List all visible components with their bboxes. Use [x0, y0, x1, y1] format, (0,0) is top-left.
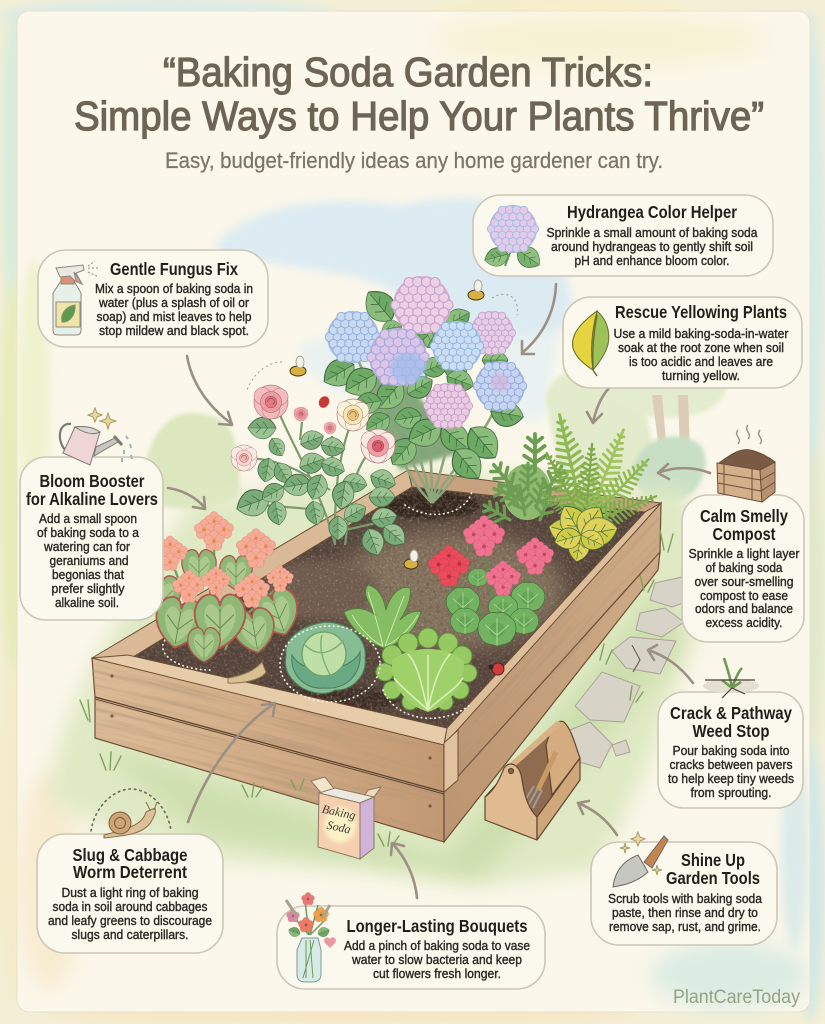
icon: yellowing leaf — [573, 311, 609, 376]
body text: shine up garden tools: Scrub tools with baking soda — [608, 891, 763, 906]
heading: gentle fungus fix: Gentle Fungus Fix — [110, 259, 238, 279]
body text: crack and pathway weed stop: cracks between pavers — [670, 757, 793, 772]
panel: shine up garden tools — [591, 832, 777, 945]
plant: romaine lettuce — [344, 585, 421, 648]
arrows — [168, 284, 710, 898]
icon: trowel — [613, 832, 668, 887]
body text: calm smelly compost: of baking soda — [706, 560, 783, 575]
garden pavers — [562, 577, 696, 768]
heading: slug and cabbage worm deterrent: Slug & Cabbage — [72, 845, 188, 865]
heading: calm smelly compost: Calm Smelly — [700, 506, 788, 526]
title — [74, 49, 764, 139]
heading: slug and cabbage worm deterrent — [72, 845, 188, 882]
bee by hydrangea — [468, 280, 517, 315]
title: Simple Ways to Help Your Plants Thrive” — [74, 93, 764, 139]
body text: longer-lasting bouquets — [344, 938, 530, 981]
body text: gentle fungus fix: Mix a spoon of baking soda in — [95, 281, 253, 296]
bed front planks — [91, 657, 445, 843]
panel: rescue yellowing plants — [563, 297, 802, 388]
plant: frilly lettuce — [376, 628, 477, 712]
body text: rescue yellowing plants: Use a mild baking-soda-in-water — [614, 326, 789, 341]
bee in soil — [404, 550, 418, 569]
arrow: garden tools to toolbox — [578, 801, 617, 835]
body text: rescue yellowing plants: turning yellow. — [662, 368, 740, 383]
body text: bloom booster — [37, 511, 140, 610]
heading: slug and cabbage worm deterrent: Worm Deterrent — [73, 862, 187, 882]
background bush and trees — [145, 358, 726, 509]
icon: spray bottle — [53, 261, 98, 335]
arrow: compost to bed — [658, 464, 710, 479]
body text: rescue yellowing plants — [614, 326, 789, 383]
panel: calm smelly compost — [682, 425, 804, 642]
body text: bloom booster: watering can for — [43, 539, 131, 554]
panel: gentle fungus fix — [38, 250, 268, 347]
heading: shine up garden tools: Shine Up — [681, 850, 745, 870]
icon: compost crate — [717, 425, 775, 502]
plant: geranium — [428, 515, 554, 646]
panel: longer-lasting bouquets — [277, 892, 545, 989]
body text: slug and cabbage worm deterrent: soda in soil around cabbages — [52, 899, 208, 914]
body text: hydrangea color helper — [546, 225, 758, 268]
sky wash — [215, 198, 575, 420]
plant: rose bush — [231, 385, 410, 559]
icon: snail with dotted ring — [91, 789, 171, 838]
baking soda box — [311, 777, 381, 859]
heading: bloom booster — [26, 471, 158, 509]
baking soda box: Baking — [321, 802, 357, 822]
body text: bloom booster: prefer slightly — [52, 581, 125, 596]
body text: shine up garden tools — [608, 891, 763, 934]
body text: gentle fungus fix: soap) and mist leaves to help — [96, 309, 252, 324]
slug in bed — [228, 662, 266, 683]
ladybug in bed — [488, 663, 504, 675]
body text: shine up garden tools: paste, then rinse and dry to — [612, 905, 758, 920]
icon: bouquet in jar — [286, 892, 336, 982]
bed rim — [92, 470, 661, 792]
heading: crack and pathway weed stop — [670, 703, 792, 741]
lawn — [50, 470, 705, 885]
panel: slug and cabbage worm deterrent — [37, 789, 223, 953]
body text: crack and pathway weed stop: to help keep tiny weeds — [668, 771, 794, 786]
grass tufts — [80, 530, 673, 846]
arrow: bouquets to baking soda — [391, 843, 417, 898]
heading: bloom booster: Bloom Booster — [40, 471, 145, 491]
raised garden bed — [90, 470, 662, 844]
body text: rescue yellowing plants: soak at the root zone when soil — [618, 340, 784, 355]
baking soda box: Soda — [326, 818, 352, 836]
toolbox — [485, 721, 580, 840]
body text: calm smelly compost — [688, 546, 800, 630]
arrow: hydrangea helper to bush — [522, 284, 556, 354]
body text: gentle fungus fix: stop mildew and black spot. — [99, 323, 249, 338]
icon: hydrangea — [482, 205, 545, 273]
body text: longer-lasting bouquets: Add a pinch of baking soda to vase — [344, 938, 530, 953]
arrow: bloom booster to begonia — [168, 488, 205, 509]
body text: bloom booster: Add a small spoon — [39, 511, 137, 526]
body text: crack and pathway weed stop: Pour baking soda into — [672, 743, 790, 758]
ladybug on rose — [317, 394, 331, 410]
body text: slug and cabbage worm deterrent — [48, 885, 212, 942]
heading: hydrangea color helper: Hydrangea Color Helper — [567, 202, 737, 222]
icon: weed in crack — [703, 658, 759, 698]
body text: hydrangea color helper: Sprinkle a small amount of baking soda — [546, 225, 758, 240]
heading: crack and pathway weed stop: Crack & Pathway — [670, 703, 792, 723]
body text: gentle fungus fix: water (plus a splash of oil or — [98, 295, 250, 310]
panel: crack and pathway weed stop — [658, 658, 803, 808]
body text: crack and pathway weed stop — [668, 743, 794, 800]
body text: shine up garden tools: remove sap, rust, and grime. — [609, 919, 761, 934]
heading: shine up garden tools — [666, 850, 760, 888]
body text: slug and cabbage worm deterrent: and leafy greens to discourage — [48, 913, 212, 928]
baking soda rings — [163, 490, 472, 718]
body text: longer-lasting bouquets: cut flowers fresh longer. — [373, 966, 501, 981]
heading: crack and pathway weed stop: Weed Stop — [692, 721, 770, 741]
soil — [135, 488, 644, 728]
bee by roses — [247, 356, 306, 390]
body text: calm smelly compost: excess acidity. — [706, 615, 782, 630]
body text: longer-lasting bouquets: water to slow bacteria and keep — [351, 952, 522, 967]
body text: slug and cabbage worm deterrent: Dust a light ring of baking — [62, 885, 198, 900]
arrow: slug deterrent to cabbage ring — [188, 703, 275, 822]
heading: longer-lasting bouquets: Longer-Lasting Bouquets — [346, 916, 528, 936]
body text: hydrangea color helper: around hydrangeas to gently shift soil — [551, 239, 753, 254]
body text: calm smelly compost: odors and balance — [695, 601, 793, 616]
plant: hydrangea bush — [318, 276, 527, 503]
title: “Baking Soda Garden Tricks: — [163, 49, 653, 95]
body text: hydrangea color helper: pH and enhance bloom color. — [574, 253, 730, 268]
arrow: fungus fix to roses — [187, 356, 232, 425]
plant: cabbage — [285, 622, 365, 694]
body text: bloom booster: geraniums and — [50, 553, 128, 568]
heading: calm smelly compost: Compost — [712, 524, 776, 544]
heading: rescue yellowing plants: Rescue Yellowing Plants — [615, 302, 787, 322]
plant: begonia — [143, 512, 306, 662]
watermark: PlantCareToday — [673, 987, 800, 1008]
body text: bloom booster: alkaline soil. — [55, 595, 119, 610]
body text: rescue yellowing plants: is too acidic and leaves are — [629, 354, 773, 369]
heading: calm smelly compost — [700, 506, 788, 544]
heading: shine up garden tools: Garden Tools — [666, 868, 760, 888]
arrow: rescue to fern — [587, 388, 609, 423]
bed side planks — [443, 502, 662, 844]
body text: calm smelly compost: compost to ease — [700, 588, 788, 603]
body text: bloom booster: begonias that — [52, 567, 124, 582]
panel: hydrangea color helper — [473, 195, 773, 276]
body text: slug and cabbage worm deterrent: slugs and caterpillars. — [72, 927, 188, 942]
heading: bloom booster: for Alkaline Lovers — [26, 489, 158, 509]
icon: watering can — [60, 408, 132, 465]
body text: calm smelly compost: Sprinkle a light layer — [688, 546, 800, 561]
plant: herb sprigs — [480, 434, 570, 528]
panel: bloom booster — [20, 408, 163, 620]
subtitle: Easy, budget-friendly ideas any home gardener can try. — [165, 148, 663, 173]
body text: bloom booster: of baking soda to a — [37, 525, 140, 540]
plant: ferns — [535, 410, 661, 537]
plant: yellow variegated leaves — [546, 500, 620, 563]
body text: crack and pathway weed stop: from sprouting. — [690, 785, 772, 800]
body text: calm smelly compost: over sour-smelling — [694, 574, 794, 589]
arrow: weed stop to pavers — [648, 645, 693, 683]
body text: gentle fungus fix — [95, 281, 253, 338]
